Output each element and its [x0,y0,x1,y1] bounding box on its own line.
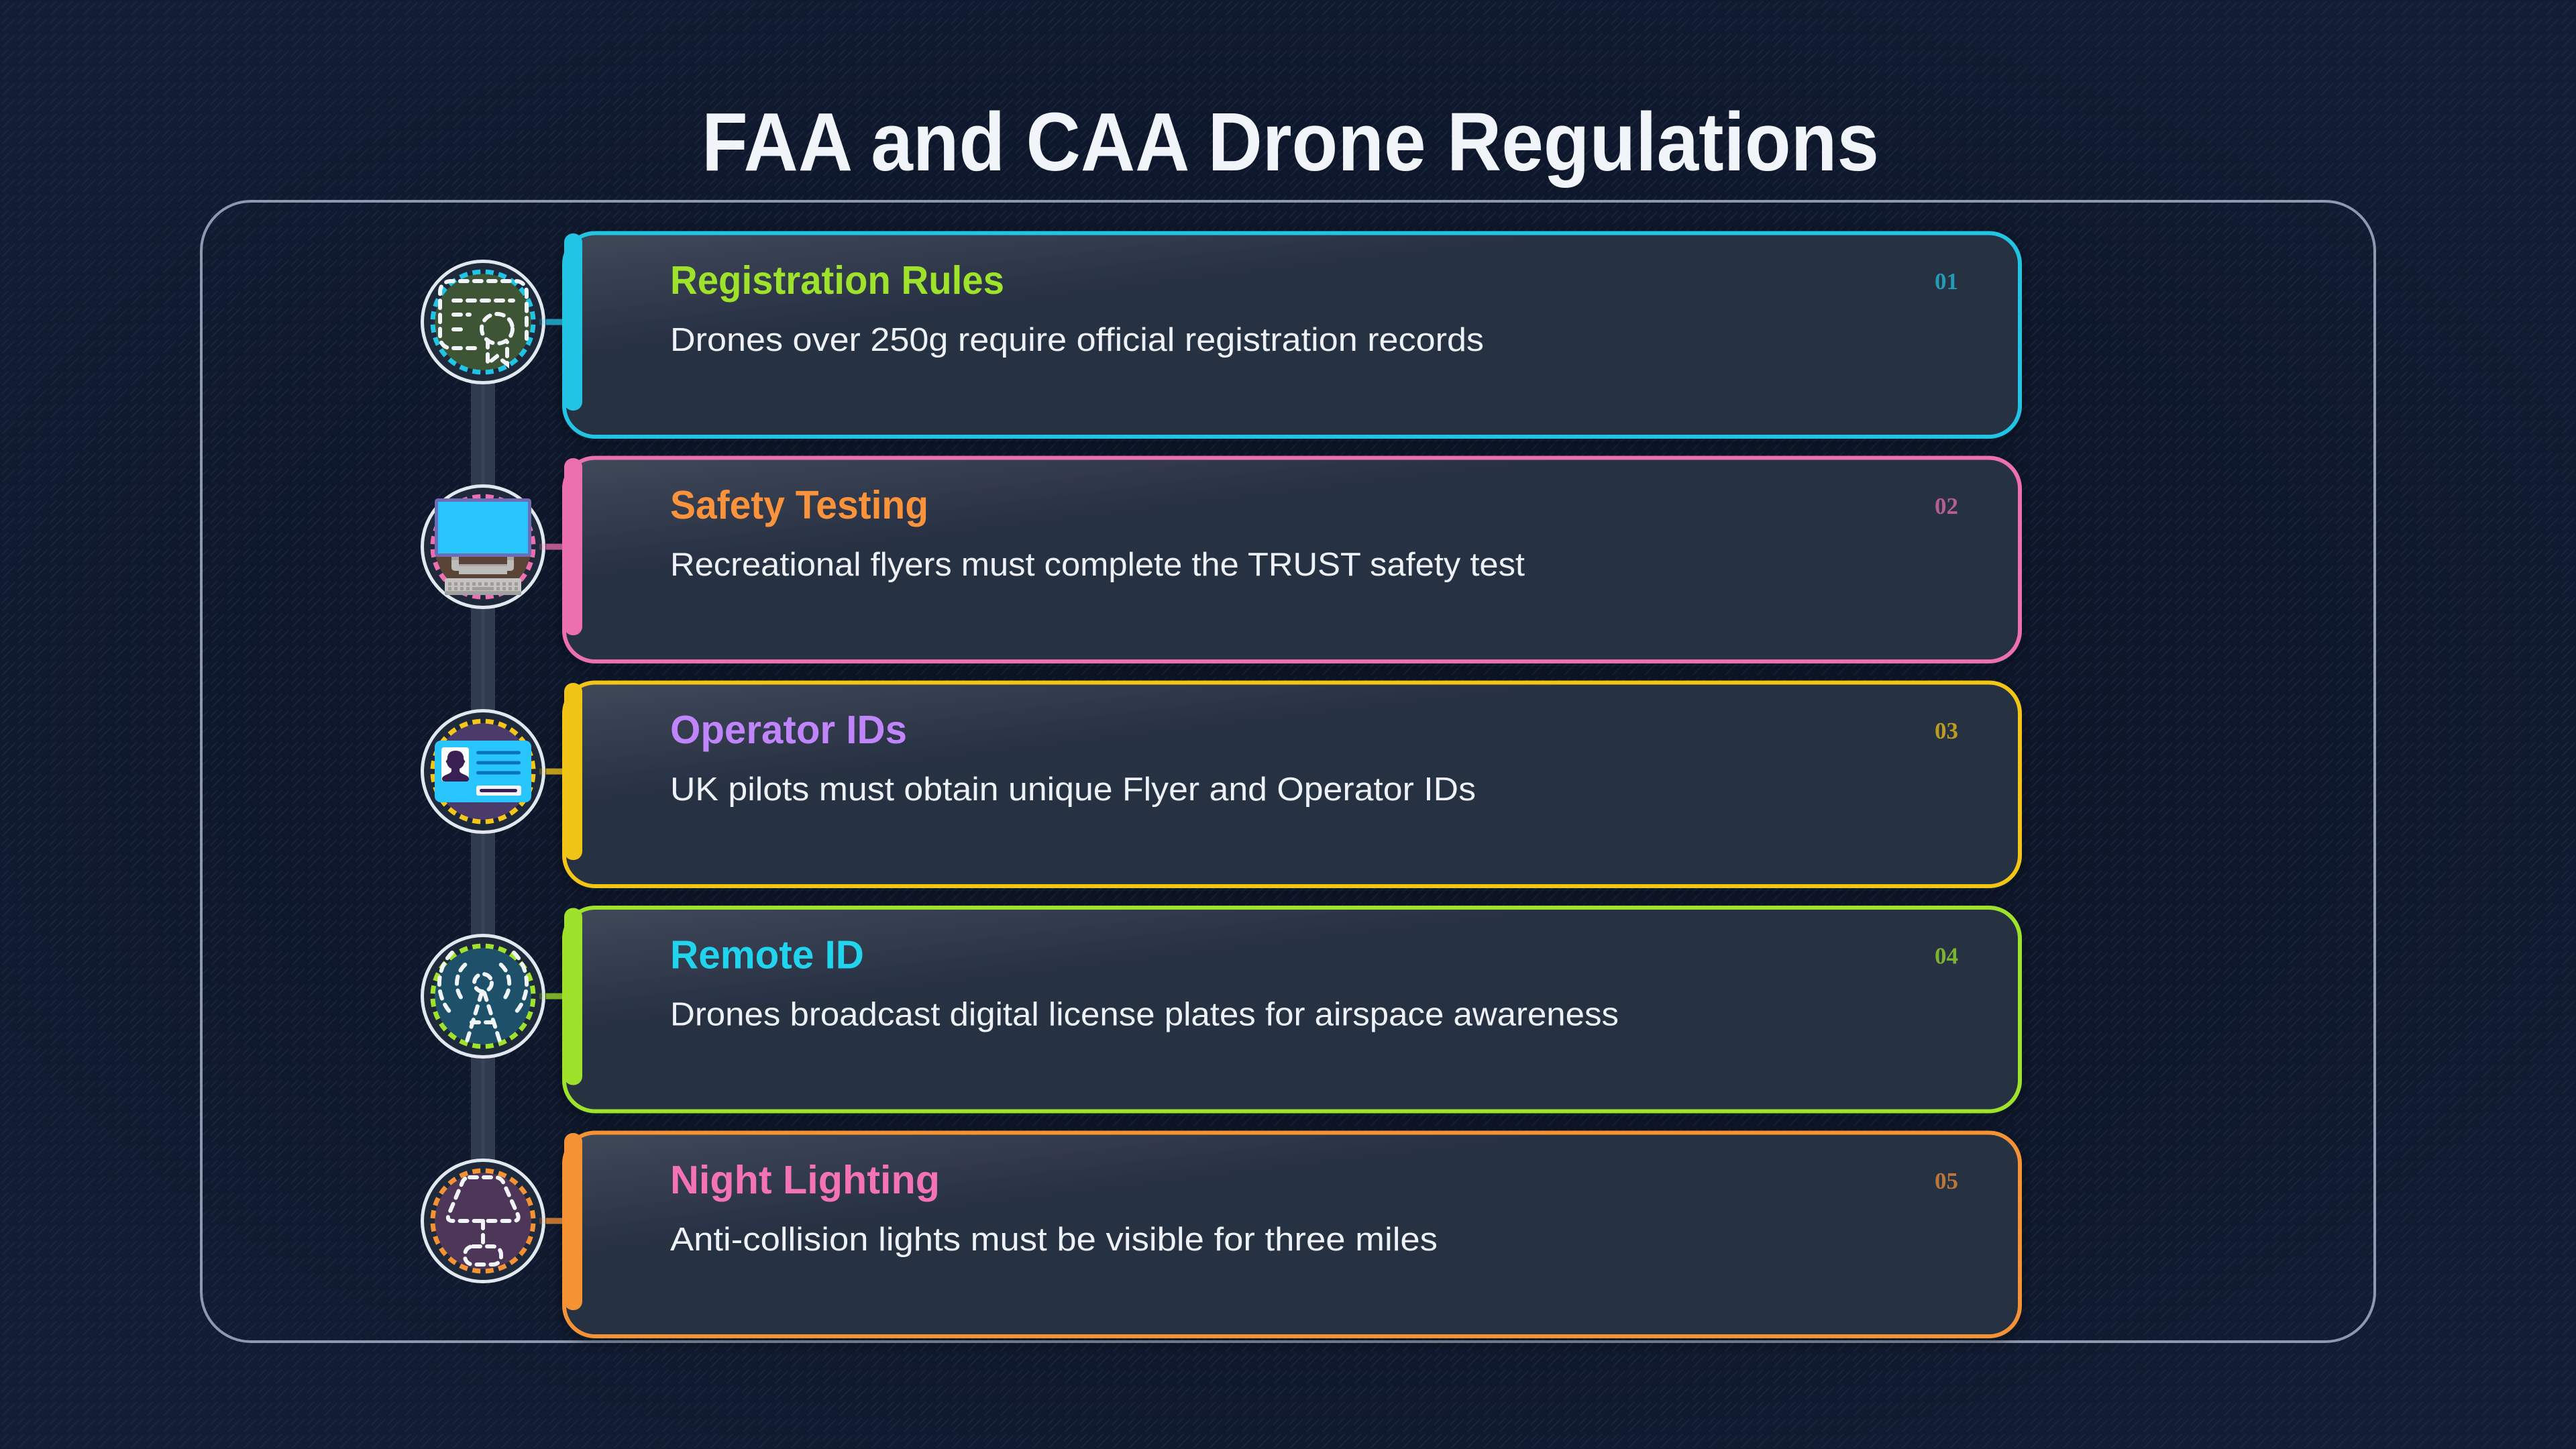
item 1: Registration Rules [423,233,2020,437]
icon: lamp [423,1161,543,1281]
item 2: Safety Testing [423,458,2020,661]
accent bar 1 [564,233,582,411]
accent bar 5 [564,1133,582,1310]
number 5: 05 [1935,1168,1958,1194]
item 4: Remote ID [423,908,2020,1111]
number 2: 02 [1935,493,1958,519]
description 3: UK pilots must obtain unique Flyer and Operator IDs [670,771,1476,808]
card 1 [564,233,2020,437]
item 5: Night Lighting [423,1132,2020,1336]
heading 5: Night Lighting [670,1158,940,1202]
link 1 [539,319,562,325]
heading 2: Safety Testing [670,483,928,527]
description 5: Anti-collision lights must be visible for three miles [670,1222,1438,1258]
link 3 [539,769,562,774]
number 4: 04 [1935,943,1958,969]
card 3 [564,683,2020,886]
link 4 [539,993,562,1000]
outer panel frame [201,201,2375,1342]
card 4 [564,908,2020,1111]
icon: certificate [423,262,543,382]
icon: ID card [423,711,543,832]
link 5 [539,1218,562,1224]
title: FAA and CAA Drone Regulations [702,97,1879,189]
description 1: Drones over 250g require official registration records [670,322,1484,358]
item 3: Operator IDs [423,683,2020,886]
description 2: Recreational flyers must complete the TRUST safety test [670,547,1525,583]
number 1: 01 [1935,268,1958,294]
card 5 [564,1132,2020,1336]
accent bar 2 [564,458,582,635]
number 3: 03 [1935,718,1958,744]
vertical timeline connector [471,322,495,1221]
icon: computer [423,486,543,608]
heading 4: Remote ID [670,932,864,977]
description 4: Drones broadcast digital license plates for airspace awareness [670,997,1619,1033]
heading 1: Registration Rules [670,258,1004,303]
accent bar 4 [564,908,582,1085]
card 2 [564,458,2020,661]
accent bar 3 [564,683,582,860]
link 2 [539,543,562,550]
heading 3: Operator IDs [670,708,907,752]
icon: radio tower [423,935,543,1057]
